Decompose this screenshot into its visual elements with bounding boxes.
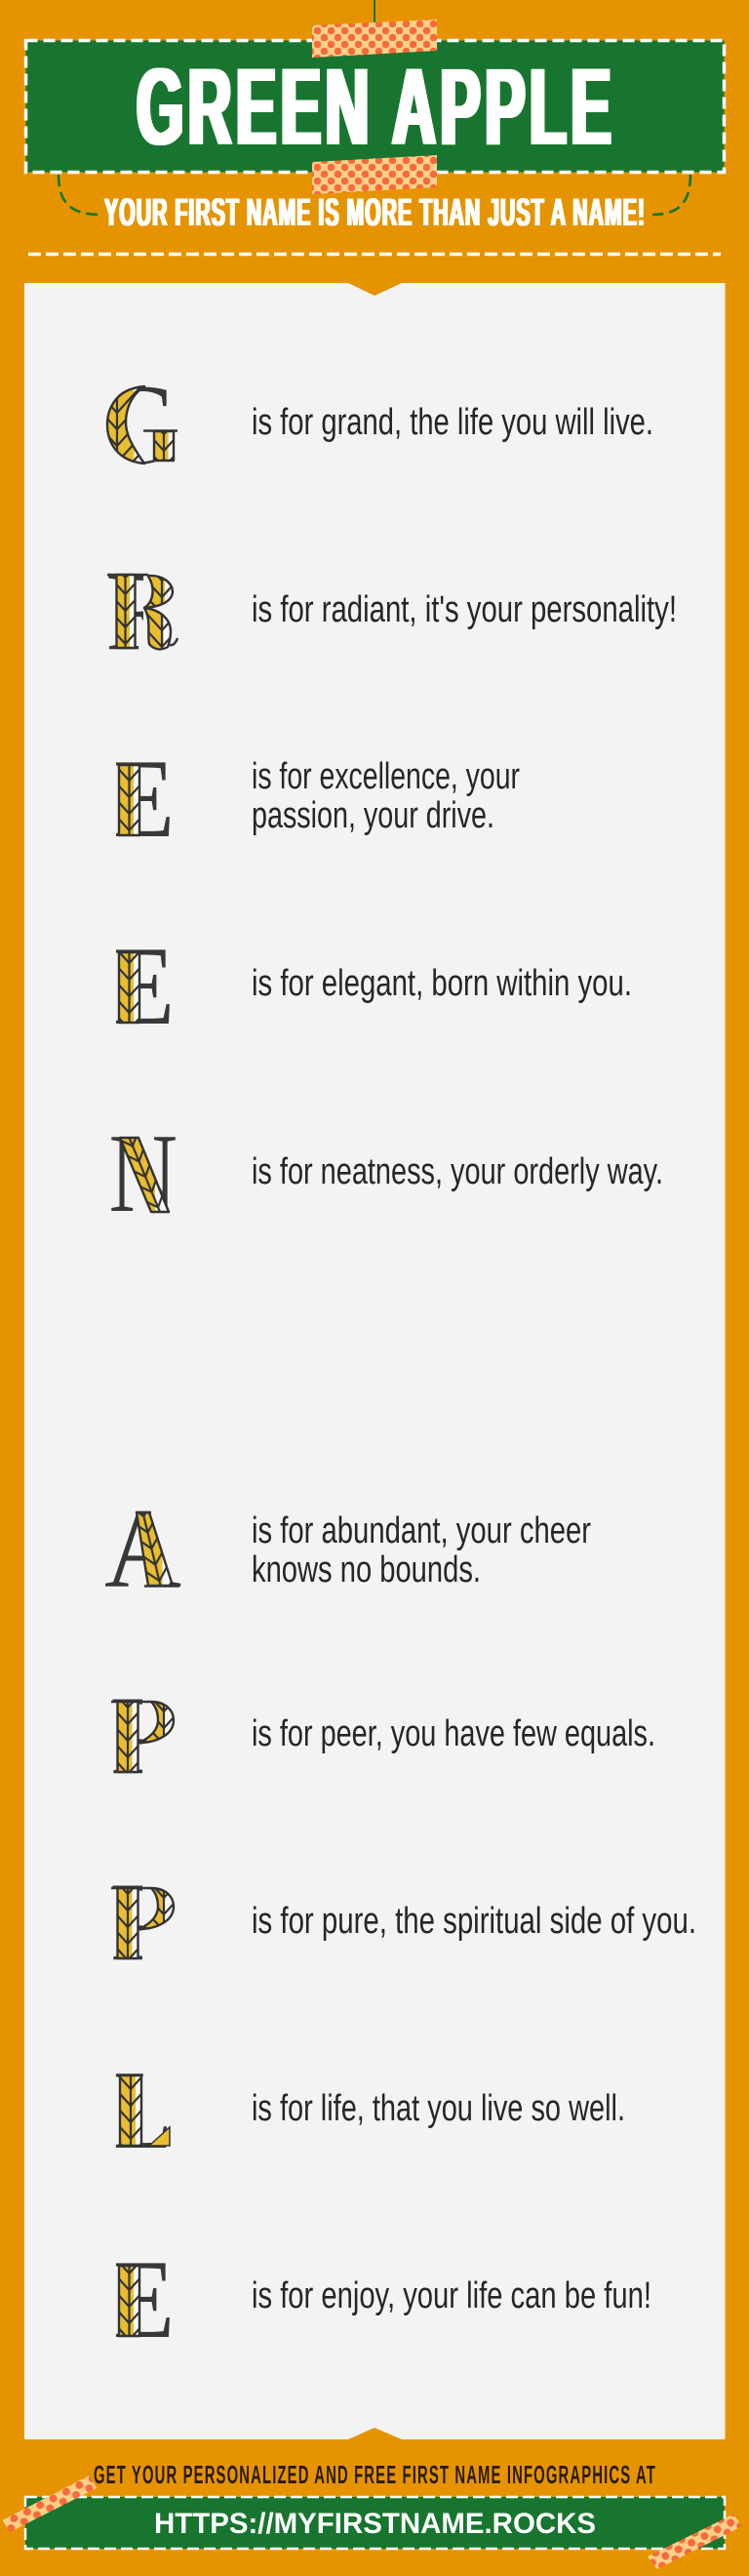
description E elegant: is for elegant, born within you. <box>252 963 632 1004</box>
description E excellence <box>252 756 520 836</box>
string from top to tape <box>374 0 375 23</box>
description E excellence: is for excellence, your <box>252 756 520 797</box>
title banner <box>25 41 724 172</box>
icon: wheat letter E: E <box>113 2237 175 2361</box>
tape top <box>312 20 437 58</box>
icon: wheat letter P <box>111 1700 176 1774</box>
icon: wheat letter L: L <box>113 2048 173 2172</box>
footer url: HTTPS://MYFIRSTNAME.ROCKS <box>154 2508 596 2540</box>
connector curve right <box>652 175 690 215</box>
panel: letters <box>24 283 726 2439</box>
description E excellence: passion, your drive. <box>252 795 494 836</box>
description A: is for abundant, your cheer <box>252 1510 591 1551</box>
connector curve left <box>59 175 100 215</box>
description L: is for life, that you live so well. <box>252 2088 625 2129</box>
icon: wheat letter E: E <box>113 737 175 861</box>
tape footer right <box>648 2515 742 2569</box>
description A: knows no bounds. <box>252 1550 481 1590</box>
description A <box>252 1510 591 1590</box>
dashed divider <box>28 253 721 256</box>
tape bottom <box>312 155 437 194</box>
icon: wheat letter E: E <box>113 924 175 1048</box>
icon: wheat letter P: P <box>109 1860 177 1984</box>
icon: wheat letter G: G <box>103 362 177 486</box>
icon: wheat letter P <box>111 1885 176 1959</box>
icon: wheat letter R <box>107 574 179 651</box>
icon: wheat letter P: P <box>109 1673 177 1797</box>
tape footer left <box>2 2475 97 2532</box>
icon: wheat letter N: N <box>109 1111 177 1235</box>
icon: wheat letter G <box>105 384 177 464</box>
footer banner <box>25 2497 725 2549</box>
icon: wheat letter A: A <box>104 1487 181 1611</box>
icon: wheat letter R: R <box>105 549 178 673</box>
